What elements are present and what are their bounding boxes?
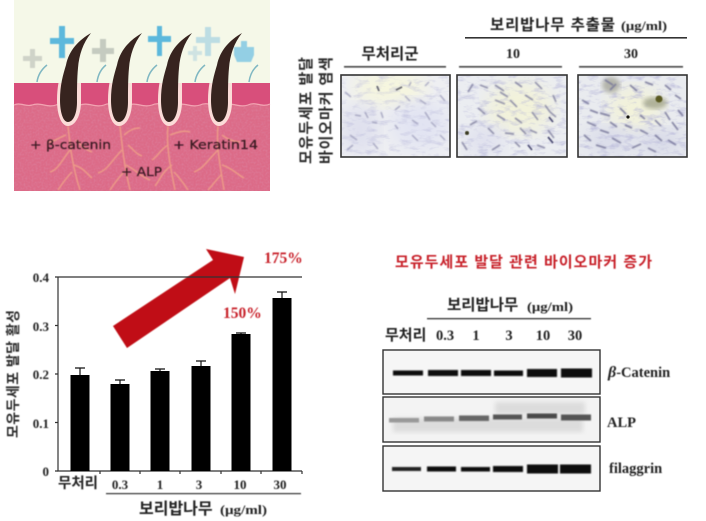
- y axis title: 모유두세포 발달 활성: [5, 310, 21, 438]
- y tick labels: 0.4: [33, 270, 50, 285]
- y tick labels: [33, 270, 50, 479]
- western blot labels: 3: [505, 328, 513, 344]
- western blot labels: 1: [472, 328, 480, 344]
- icon: blue and grey plus signs: [23, 26, 254, 68]
- micrograph: 10 ug/ml: [457, 75, 567, 157]
- text: illustration labels: + ALP: [121, 164, 163, 179]
- x labels: [58, 475, 301, 518]
- callout: 150 percent: 150%: [223, 305, 262, 322]
- x labels: 10: [234, 477, 246, 492]
- column labels: micrographs: 10: [506, 47, 520, 62]
- western blot: beta-catenin: [383, 350, 600, 394]
- western blot labels: 10: [536, 328, 550, 344]
- label: ALP: ALP: [607, 415, 636, 431]
- text: illustration labels: + Keratin14: [173, 137, 258, 152]
- illustration: hair follicles: [14, 0, 270, 191]
- vertical label: staining: 바이오마커 염색: [318, 57, 335, 164]
- callout: 175 percent: 175%: [264, 250, 303, 267]
- y tick labels: 0: [42, 464, 49, 479]
- western blot labels: 보리밥나무: [447, 296, 518, 314]
- label: beta-catenin: β-Catenin: [607, 364, 670, 381]
- arrow: increasing trend: [113, 249, 244, 348]
- x labels: 1: [157, 477, 163, 492]
- western blot labels: [385, 296, 591, 344]
- vertical label: staining: [298, 57, 335, 164]
- icon: hair shafts and bulbs: [57, 33, 242, 126]
- text: illustration labels: + β-catenin: [30, 137, 111, 152]
- x labels: (μg/ml): [220, 503, 267, 517]
- western blot labels: 30: [568, 328, 582, 344]
- bar chart: dermal papilla activity: [5, 270, 302, 518]
- vertical label: staining: 모유두세포 발달: [298, 57, 315, 164]
- label: filaggrin: filaggrin: [609, 461, 662, 477]
- icon: roots: [48, 126, 244, 190]
- heading: extract concentration: (μg/ml): [621, 19, 667, 33]
- heading: biomarker increase: 모유두세포 발달 관련 바이오마커 증가: [395, 254, 652, 271]
- x labels: 0.3: [112, 477, 129, 492]
- column labels: micrographs: [344, 45, 683, 68]
- icon: small hairs: [37, 65, 258, 82]
- y tick labels: 0.1: [33, 416, 49, 431]
- x labels: 보리밥나무: [139, 500, 213, 518]
- micrograph: untreated: [340, 70, 450, 157]
- y tick labels: 0.3: [33, 319, 50, 334]
- error bars: [75, 292, 287, 385]
- western blot: ALP: [383, 397, 600, 442]
- western blot labels: (μg/ml): [527, 300, 573, 314]
- text: illustration labels: [30, 137, 258, 179]
- western blot: filaggrin: [383, 446, 600, 491]
- heading: extract concentration: [465, 16, 687, 39]
- axes: [55, 277, 302, 474]
- column labels: micrographs: 30: [624, 47, 638, 62]
- western blot labels: 무처리: [385, 327, 426, 344]
- x labels: 3: [196, 477, 203, 492]
- heading: extract concentration: 보리밥나무 추출물: [490, 16, 615, 34]
- western blot labels: 0.3: [436, 328, 454, 344]
- micrograph: 30 ug/ml: [578, 75, 687, 157]
- column labels: micrographs: 무처리군: [361, 45, 419, 63]
- bars: [70, 298, 292, 471]
- x labels: 30: [274, 477, 286, 492]
- x labels: 무처리: [58, 475, 98, 492]
- y tick labels: 0.2: [33, 367, 49, 382]
